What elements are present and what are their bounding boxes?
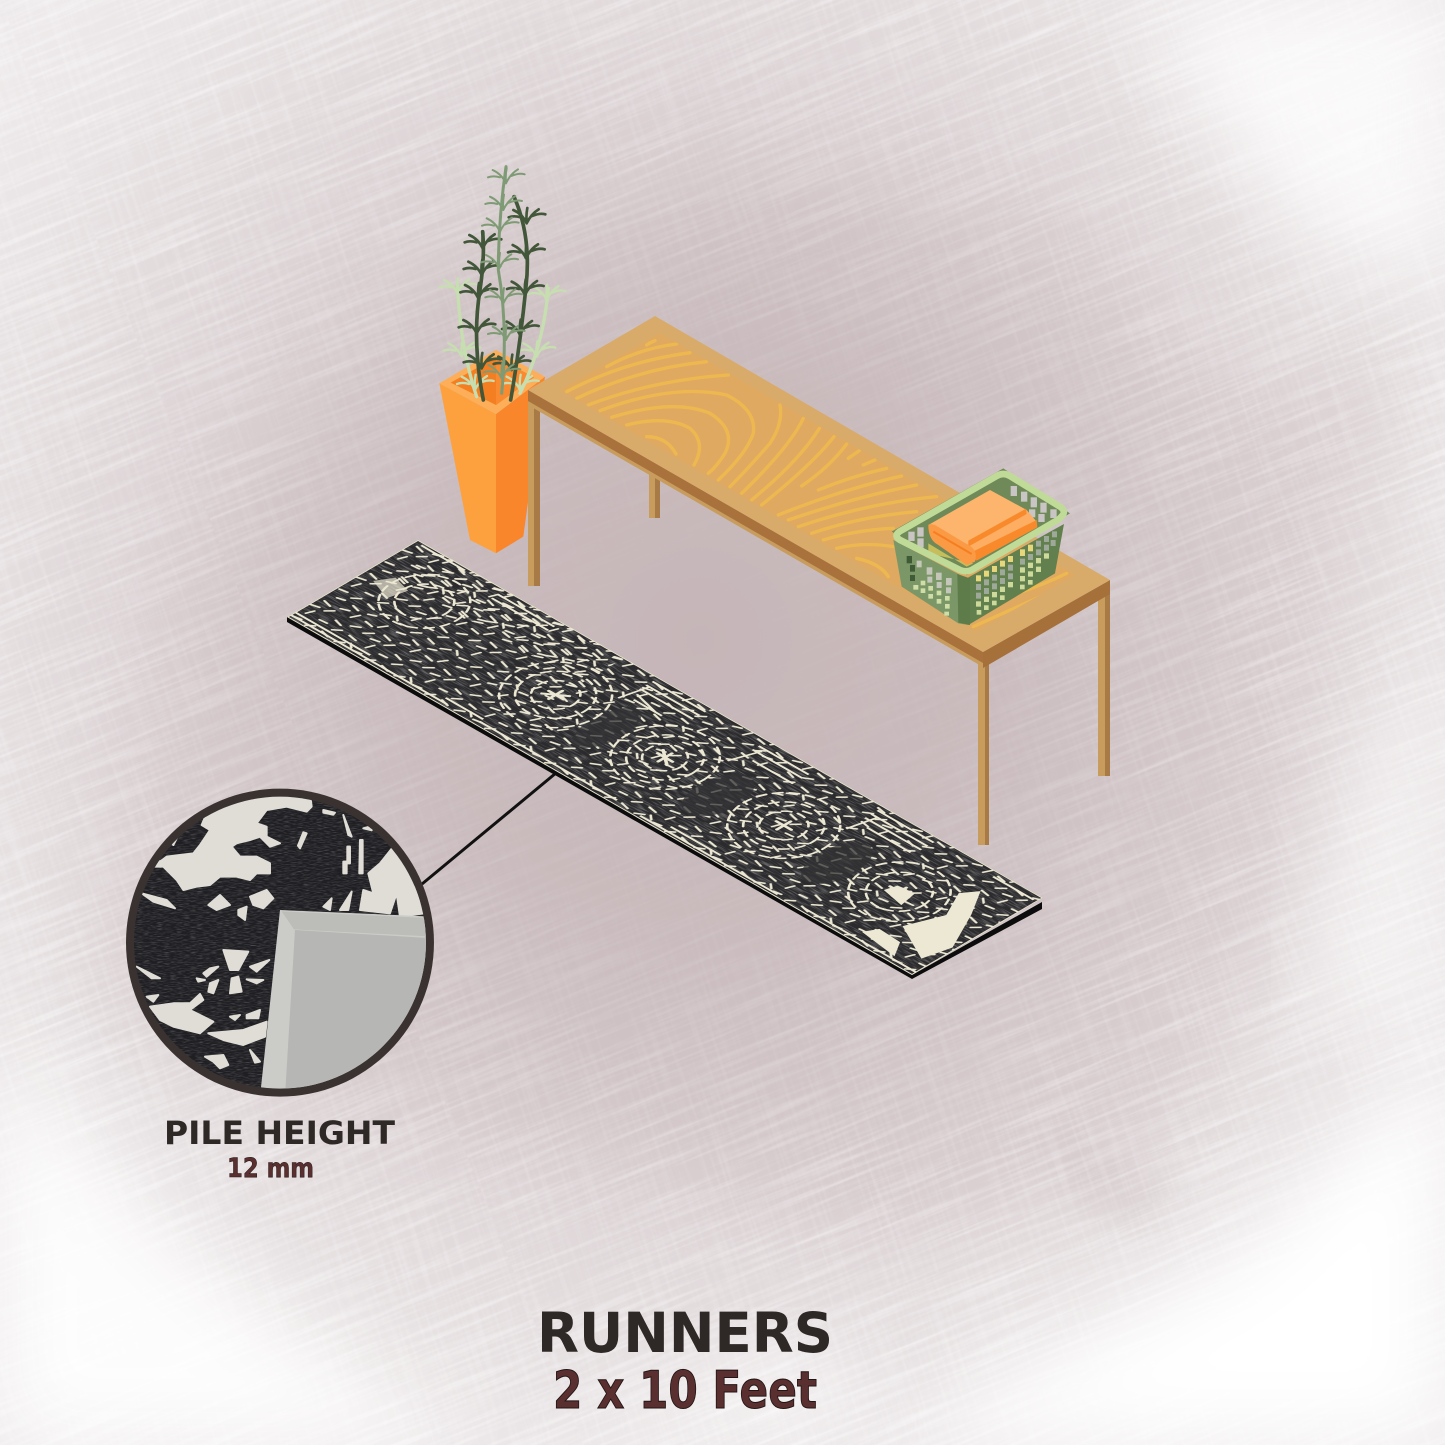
table top [528, 316, 1110, 652]
zoom detail circle [126, 789, 434, 1097]
basket left face [893, 540, 968, 625]
orange pot [439, 350, 545, 553]
table apron [528, 390, 983, 667]
left front leg [528, 395, 540, 586]
runner rug [287, 533, 1056, 979]
basket right face [967, 524, 1064, 625]
wood grain lines [567, 341, 1090, 627]
pile height connector line [422, 773, 556, 884]
basket holes left [907, 556, 952, 616]
plant pot and plant [439, 167, 565, 553]
table top grain panel [560, 333, 1075, 632]
rug surface pattern [287, 533, 1056, 975]
basket rim [896, 474, 1064, 571]
wooden table [528, 316, 1110, 845]
pile height label: PILE HEIGHT [164, 1114, 395, 1152]
back leg [649, 470, 660, 518]
cream carpet pattern [137, 793, 425, 1068]
plant stems [439, 167, 565, 400]
near corner leg [978, 655, 989, 845]
circle base [126, 789, 434, 1097]
title: RUNNERS [537, 1301, 833, 1365]
folded orange towels [928, 490, 1037, 567]
basket corner [957, 574, 970, 625]
pile height value: 12 mm [227, 1153, 314, 1184]
size subtitle: 2 x 10 Feet [553, 1361, 817, 1421]
right leg [1098, 585, 1110, 776]
basket holes right [976, 531, 1057, 615]
basket with towels [892, 468, 1070, 625]
rug edge thickness [287, 617, 1042, 979]
basket back holes [908, 486, 1057, 548]
rug backing corner [260, 910, 433, 1097]
basket inside [892, 468, 1070, 575]
